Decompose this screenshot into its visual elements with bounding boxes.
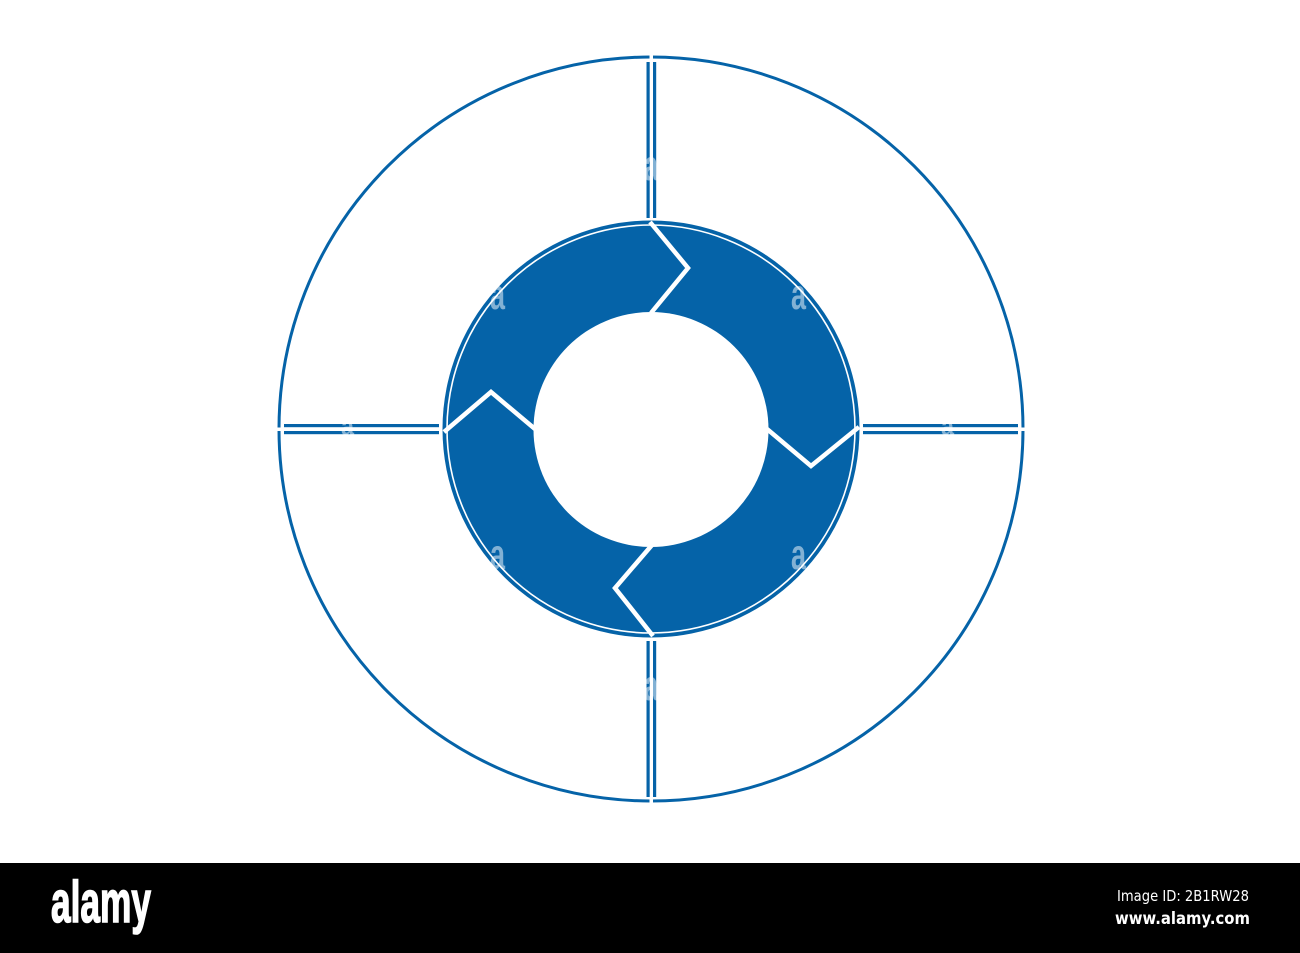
faint watermark marks: a xyxy=(644,662,659,710)
footer band xyxy=(0,863,1300,953)
logo wordmark: alamy xyxy=(51,870,151,935)
faint watermark marks xyxy=(341,142,955,710)
separator: left xyxy=(284,424,439,434)
faint watermark marks: a xyxy=(644,142,659,190)
separator: bottom xyxy=(646,641,656,797)
faint watermark marks: a xyxy=(490,271,506,319)
site address: www.alamy.com xyxy=(1115,909,1250,929)
separator: top xyxy=(646,62,656,218)
arrow divider: right xyxy=(767,427,859,466)
outer circle gaps xyxy=(274,52,1028,807)
ring body xyxy=(442,220,860,638)
separator: right xyxy=(863,424,1018,434)
arrow divider: bottom xyxy=(615,545,653,636)
arrow divider: left xyxy=(444,392,535,432)
arrow divider: top xyxy=(650,222,688,313)
outer circle xyxy=(279,57,1023,801)
faint watermark marks: a xyxy=(341,413,355,441)
centre hole xyxy=(534,312,768,547)
image id: Image ID: 2B1RW28 xyxy=(1117,887,1249,905)
faint watermark marks: a xyxy=(490,531,506,579)
faint watermark marks: a xyxy=(941,413,955,441)
faint watermark marks: a xyxy=(791,531,807,579)
thin white inner ring line xyxy=(447,225,855,633)
faint watermark marks: a xyxy=(791,271,807,319)
central cycle ring xyxy=(442,220,860,638)
